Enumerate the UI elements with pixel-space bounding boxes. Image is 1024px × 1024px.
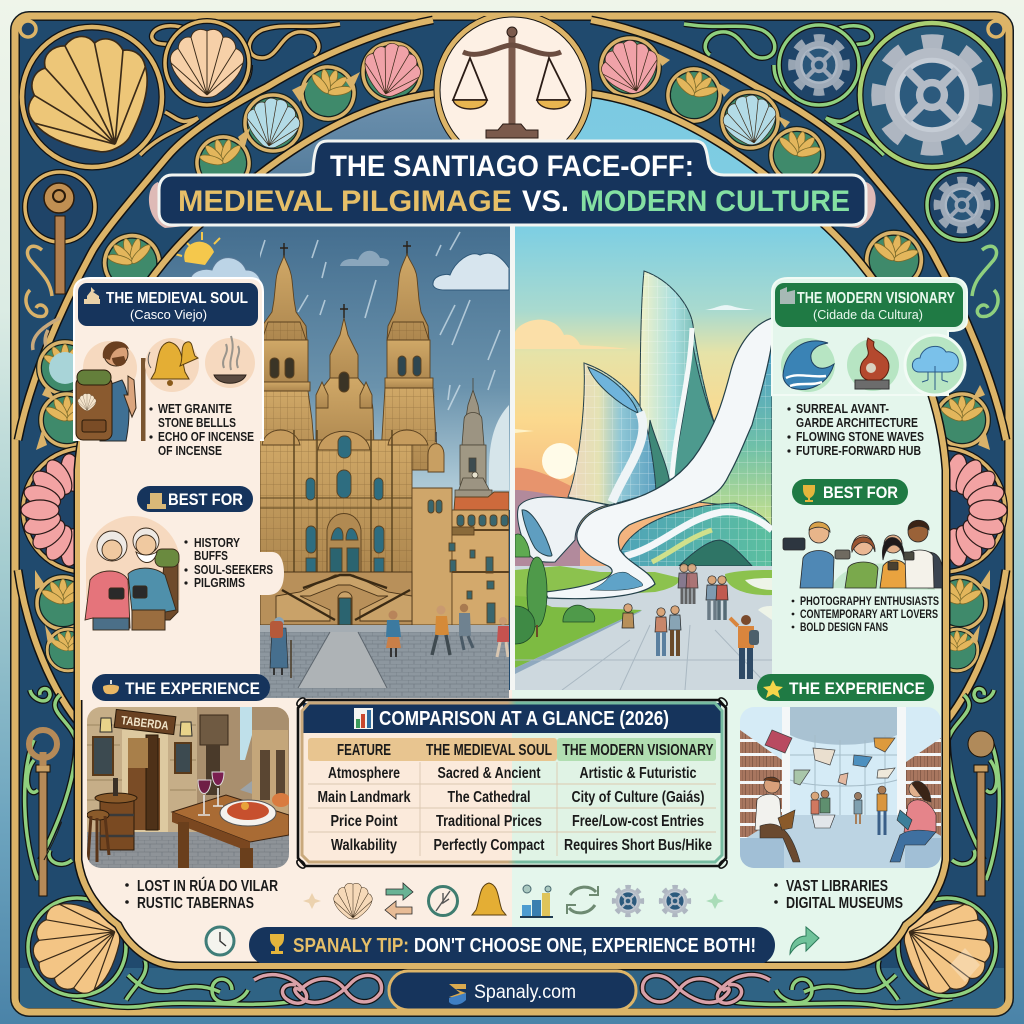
best for pill, medieval: [137, 486, 253, 512]
corner ring, top left: [20, 21, 36, 37]
table row: walkability: Requires Short Bus/Hike: [564, 837, 712, 854]
lower right border: crozier staff and vines: [948, 689, 999, 896]
modern heading plate: (Cidade da Cultura): [813, 307, 923, 322]
table row: walkability: Walkability: [331, 837, 397, 854]
bullet list: medieval atmosphere: STONE BELLLS: [158, 415, 236, 430]
medieval heading plate: (Casco Viejo): [130, 307, 207, 322]
icon: data cloud: [905, 335, 965, 395]
medieval heading plate: THE MEDIEVAL SOUL: [106, 290, 248, 307]
arch band of shell medallions, right: [596, 35, 926, 292]
table fill left: [300, 700, 512, 866]
bullet list: modern best for: [792, 596, 939, 634]
cathedral plaza paving: [260, 625, 509, 700]
left experience pill: [92, 674, 270, 701]
icon: wave: [781, 338, 835, 392]
modern scene: City of Culture: [515, 270, 772, 690]
trees and bushes: [515, 534, 596, 644]
grey-white snout wing: [518, 497, 608, 562]
icon: pilgrim staff: [141, 358, 146, 441]
lower glass hall: [618, 503, 772, 568]
right experience list: VAST LIBRARIES: [786, 878, 888, 895]
bullet list: modern atmosphere: GARDE ARCHITECTURE: [796, 415, 918, 430]
tip lead-in: SPANALY TIP:: [293, 935, 409, 957]
right tower: [380, 241, 438, 470]
bullet list: medieval atmosphere: [149, 401, 254, 458]
right experience list: DIGITAL MUSEUMS: [786, 895, 903, 912]
tip text: DON'T CHOOSE ONE, EXPERIENCE BOTH!: [414, 935, 756, 957]
scallop shell medallion, bottom right: [889, 887, 1004, 1006]
bullet list: medieval best for: PILGRIMS: [194, 575, 245, 590]
sunset clouds, sun and hill: [515, 305, 755, 570]
taberna illustration: [87, 707, 290, 868]
corner leaves: [295, 696, 729, 870]
right side band: pink shell and medallions: [881, 385, 1007, 671]
sun and cloud over the arch, left: [176, 232, 260, 280]
icon: sparkle right: [706, 893, 724, 909]
table header row: [337, 742, 714, 759]
left experience list: LOST IN RÚA DO VILAR: [137, 877, 278, 895]
panel backing: [74, 278, 263, 440]
spanaly tip banner: [249, 927, 775, 963]
left experience list: [125, 877, 278, 912]
table header row: FEATURE: [337, 742, 391, 759]
bullet list: medieval best for: BUFFS: [194, 548, 228, 563]
table row: atmosphere: Atmosphere: [328, 765, 400, 782]
grand staircase: [260, 572, 412, 625]
bullet list: medieval best for: [184, 535, 273, 590]
title band: [303, 703, 721, 733]
cathedral scene: [258, 226, 509, 700]
right experience pill: [757, 674, 934, 701]
icon: incense bowl: [205, 336, 255, 388]
bullet list: medieval atmosphere: ECHO OF INCENSE: [158, 429, 254, 444]
icon: bell: [472, 883, 506, 915]
icon: cycle arrows: [567, 886, 598, 914]
panel: modern visionary side, pale mint lower area: [512, 690, 946, 970]
table row: price point: Traditional Prices: [436, 813, 542, 830]
icon: gear two: [659, 885, 691, 917]
panel: the medieval soul: [74, 278, 284, 700]
table row: main landmark: The Cathedral: [448, 789, 530, 806]
icon: bells: [145, 338, 199, 392]
right experience pill: THE EXPERIENCE: [789, 679, 925, 698]
small gear medallion, top right: [779, 25, 859, 105]
table row: walkability: [331, 837, 712, 854]
icon: pilgrim with backpack: [76, 341, 137, 441]
bullet list: modern best for: CONTEMPORARY ART LOVERS: [800, 609, 938, 621]
bullet list: modern atmosphere: SURREAL AVANT-: [796, 401, 889, 416]
header fill modern: [557, 738, 716, 761]
right sky fill: [575, 98, 866, 286]
panel: medieval soul side, pale peach lower area: [78, 690, 512, 970]
chart icon: [354, 708, 373, 729]
right tower glass: [698, 352, 772, 526]
right experience list: [774, 878, 903, 912]
table fill right: [512, 700, 724, 866]
panel: the modern visionary: [772, 278, 967, 634]
small peach shell medallion, top left: [165, 21, 249, 105]
icon row below table: [303, 883, 724, 919]
scales of justice medallion: [434, 16, 592, 140]
corner ring, top right: [988, 21, 1004, 37]
footer text: Spanaly.com: [474, 982, 576, 1003]
rain and clouds: [258, 232, 509, 490]
lower left border: crozier staff and vines: [25, 689, 76, 896]
icon: group of young photographers: [783, 520, 942, 590]
flowing white ribbon roof: [545, 318, 772, 599]
table inner border: [302, 703, 722, 862]
library illustration: [740, 707, 941, 868]
table row: price point: Free/Low-cost Entries: [572, 813, 704, 830]
central pediment: [316, 304, 374, 450]
comparison table: [295, 696, 729, 870]
title banner: [149, 141, 876, 228]
scallop shell medallion, bottom left: [20, 887, 135, 1006]
modern heading plate: [775, 283, 963, 327]
pilgrims walking in the plaza: [270, 604, 509, 678]
modern heading plate: THE MODERN VISIONARY: [797, 290, 955, 307]
left tower: [264, 243, 314, 440]
plaza and lawns: [515, 566, 772, 690]
table row: walkability: Perfectly Compact: [434, 837, 544, 854]
panel backing: [772, 278, 967, 395]
icon: sparkle left: [303, 893, 321, 909]
row and column rules: [308, 762, 716, 856]
bullet list: modern best for: BOLD DESIGN FANS: [800, 622, 888, 634]
ribbon pool: [590, 572, 643, 590]
left experience list: RUSTIC TABERNAS: [137, 895, 254, 912]
table title: COMPARISON AT A GLANCE (2026): [379, 708, 669, 730]
inner gold arch outline: [78, 93, 946, 966]
tall tower: [640, 271, 716, 500]
icon: sculpture: [847, 338, 899, 391]
bullet list: modern atmosphere: FUTURE-FORWARD HUB: [796, 443, 921, 458]
visitors walking through the plaza: [622, 564, 759, 679]
medieval heading plate: [78, 283, 258, 326]
small clock tower: [455, 378, 492, 500]
best for pill, medieval: BEST FOR: [168, 490, 243, 509]
title line two: modern: MODERN CULTURE: [580, 185, 850, 218]
bullet list: modern best for: PHOTOGRAPHY ENTHUSIASTS: [800, 596, 939, 608]
soul-seekers bulge: [258, 552, 284, 595]
large scallop shell medallion, top left: [7, 15, 173, 177]
cathedral facade: [260, 430, 444, 572]
bottom border: vines and knots, left: [72, 960, 382, 1007]
footer url pill: [389, 971, 636, 1010]
icon: senior pilgrim couple: [85, 516, 180, 630]
taberna sign: TABERDA: [120, 713, 170, 733]
bullet list: medieval best for: SOUL-SEEKERS: [194, 562, 273, 577]
table row: atmosphere: Artistic & Futuristic: [580, 765, 697, 782]
scene divider: [510, 226, 515, 690]
table row: main landmark: City of Culture (Gaiás): [572, 789, 704, 806]
watermark sparkle, bottom right: [950, 948, 980, 982]
bullet list: medieval atmosphere: OF INCENSE: [158, 443, 222, 458]
table row: atmosphere: Sacred & Ancient: [438, 765, 540, 782]
header fill medieval: [308, 738, 557, 761]
best for pill, modern: BEST FOR: [823, 483, 898, 502]
left experience pill: THE EXPERIENCE: [125, 679, 260, 698]
left sky fill: [158, 98, 510, 510]
title line two: medieval: MEDIEVAL PILGIMAGE: [178, 185, 512, 218]
table row: main landmark: Main Landmark: [318, 789, 411, 806]
left peach column: [78, 430, 260, 700]
table row: price point: Price Point: [330, 813, 398, 830]
icon: exchange arrows: [385, 883, 413, 919]
table row: main landmark: [318, 789, 704, 806]
bullet list: medieval best for: HISTORY: [194, 535, 240, 550]
table row: atmosphere: [328, 765, 697, 782]
best for pill, modern: [792, 479, 908, 505]
bottom border lighter band: [20, 968, 1004, 1008]
right wing of the cathedral: [412, 488, 509, 625]
title line two: vs: VS.: [522, 185, 569, 218]
bullet list: modern atmosphere: FLOWING STONE WAVES: [796, 429, 924, 444]
table header row: THE MODERN VISIONARY: [562, 742, 714, 759]
title line one: THE SANTIAGO FACE-OFF:: [330, 150, 694, 183]
icon: clock: [206, 927, 234, 955]
shorter curved tower: [568, 363, 656, 505]
bottom border: vines and knots, right: [642, 960, 952, 1007]
table border: [298, 700, 726, 866]
large gear medallion, top right: [860, 23, 1004, 167]
icon: curved arrow: [790, 927, 819, 954]
arch interior: scenes and pale panels: [78, 90, 946, 970]
icon: gear one: [612, 885, 644, 917]
pilgrim staff medallion, upper left: [25, 172, 95, 294]
table row: price point: [330, 813, 704, 830]
left side band: pink shell and medallions: [21, 342, 147, 671]
right mint column: [772, 396, 942, 690]
column fill to scene edge: [80, 438, 260, 700]
icon: shell: [334, 883, 372, 919]
icon: compass clock: [428, 886, 458, 916]
bullet list: modern atmosphere: [787, 401, 924, 458]
left corner ornament: scrollwork and arcs: [18, 20, 433, 722]
bullet list: medieval atmosphere: WET GRANITE: [158, 401, 232, 416]
small gear medallion, right side: [927, 170, 997, 240]
table header row: THE MEDIEVAL SOUL: [426, 742, 552, 759]
right corner ornament: green scrollwork and arcs: [591, 20, 1006, 722]
arch band of shell medallions, left: [99, 38, 426, 296]
icon: city chart: [520, 885, 553, 917]
logo mark: [449, 984, 466, 1005]
